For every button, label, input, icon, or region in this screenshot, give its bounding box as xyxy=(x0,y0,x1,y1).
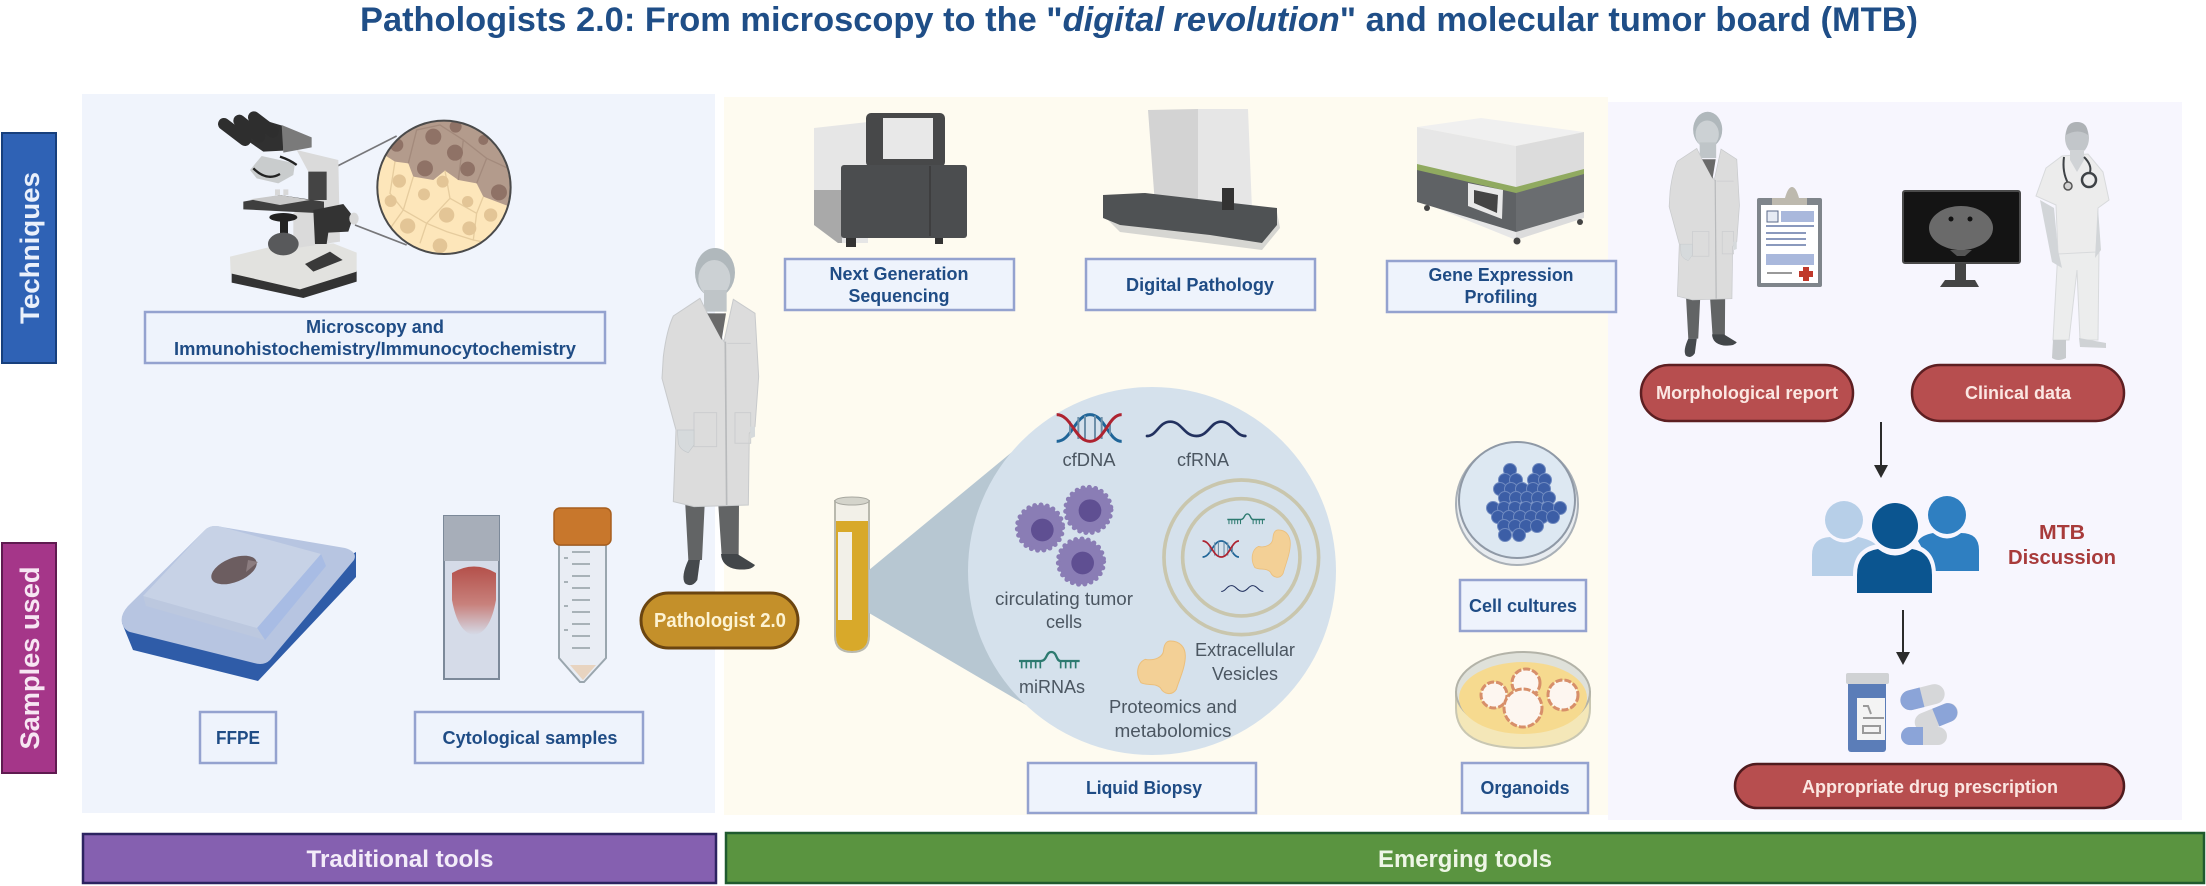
label: Microscopy and IHC/ICC: Microscopy and xyxy=(306,317,444,337)
badge: Morphological report: Morphological report xyxy=(1656,383,1838,403)
label: Liquid Biopsy xyxy=(1028,763,1256,813)
icon: gene expression analyzer xyxy=(1417,118,1584,244)
panel: traditional tools background xyxy=(82,94,715,813)
panel: clinical workflow background xyxy=(1608,102,2182,820)
label: Digital Pathology xyxy=(1086,259,1315,310)
text: miRNAs: miRNAs xyxy=(1019,677,1085,697)
label: Cytological samples xyxy=(415,712,643,763)
label: Organoids xyxy=(1462,763,1588,813)
label: Microscopy and IHC/ICC xyxy=(145,312,605,363)
icon: petri dish with cell culture xyxy=(1456,442,1578,565)
label: Microscopy and IHC/ICC: Immunohistochemistry/Immunocytochemistry xyxy=(174,339,576,359)
bar: Traditional tools: Traditional tools xyxy=(306,846,494,873)
badge: Clinical data: Clinical data xyxy=(1965,383,2072,403)
text: MTB Discussion: Discussion xyxy=(2008,547,2116,569)
label: FFPE xyxy=(200,712,276,763)
bar: Emerging tools xyxy=(726,833,2204,883)
badge: Appropriate drug prescription: Appropriate drug prescription xyxy=(1802,777,2058,797)
icon: monitor with brain scan xyxy=(1903,191,2020,287)
panel: liquid biopsy magnified circle: metabolomics xyxy=(1114,721,1232,741)
icon: miRNA xyxy=(1019,652,1080,668)
icon: circulating tumor cells xyxy=(1017,487,1111,584)
text: Extracellular Vesicles: Extracellular xyxy=(1195,640,1295,660)
text: cfDNA: cfDNA xyxy=(1062,450,1116,470)
icon: conical tube xyxy=(554,508,611,682)
label: Cytological samples: Cytological samples xyxy=(442,728,618,748)
label: Digital Pathology: Digital Pathology xyxy=(1126,275,1274,295)
badge: Pathologist 2.0 xyxy=(641,593,798,648)
label: Next Generation Sequencing xyxy=(785,259,1014,310)
icon: cfRNA strand xyxy=(1147,422,1245,436)
figure: pathologist xyxy=(662,248,759,585)
panel: liquid biopsy magnified circle xyxy=(968,387,1336,755)
icon: microscope with magnified cells xyxy=(224,117,512,298)
icon: MTB group xyxy=(1812,496,1979,597)
label: Gene Expression Profiling xyxy=(1387,261,1616,312)
text: MTB Discussion xyxy=(2008,522,2116,569)
panel: liquid biopsy magnified circle: Vesicles xyxy=(1212,664,1278,684)
callout cone: zoom into tube xyxy=(869,452,1060,705)
icon: cytology slide xyxy=(444,516,499,679)
panel: liquid biopsy magnified circle: cells xyxy=(1046,612,1082,632)
side tab: Techniques xyxy=(2,133,56,363)
side tab: Samples used xyxy=(2,543,56,773)
icon: protein xyxy=(1138,641,1185,694)
icon: clipboard report xyxy=(1757,187,1822,287)
bar: Traditional tools xyxy=(83,834,716,883)
arrow: MTB to prescription xyxy=(1896,610,1910,665)
label: Gene Expression Profiling: Gene Expression xyxy=(1428,265,1574,285)
panel: emerging tools background xyxy=(724,97,1608,815)
figure: pathologist with report xyxy=(1669,112,1739,357)
label: Cell cultures: Cell cultures xyxy=(1469,596,1577,616)
label: FFPE: FFPE xyxy=(216,728,260,748)
label: Next Generation Sequencing: Next Generation xyxy=(830,264,968,284)
icon: slide scanner xyxy=(1103,109,1280,250)
text: cfRNA: cfRNA xyxy=(1177,450,1229,470)
label: Gene Expression Profiling: Profiling xyxy=(1464,287,1538,307)
label: Organoids: Organoids xyxy=(1480,778,1570,798)
text: circulating tumor cells: circulating tumor xyxy=(995,589,1133,609)
text: MTB Discussion: MTB xyxy=(2039,522,2085,544)
badge: Pathologist 2.0: Pathologist 2.0 xyxy=(654,610,786,632)
text: Proteomics and metabolomics: Proteomics and xyxy=(1109,697,1237,717)
badge: Appropriate drug prescription xyxy=(1735,764,2124,808)
figure: clinician xyxy=(2036,122,2109,360)
badge: Morphological report xyxy=(1641,365,1853,421)
icon: organoid dish xyxy=(1456,652,1590,748)
label: Next Generation Sequencing: Sequencing xyxy=(848,286,950,306)
side tab: Techniques: Techniques xyxy=(15,172,45,324)
arrow: inputs to MTB xyxy=(1874,422,1888,478)
icon: FFPE block xyxy=(122,526,356,681)
side tab: Samples used: Samples used xyxy=(15,566,45,750)
bar: Emerging tools: Emerging tools xyxy=(1378,846,1552,873)
label: Cell cultures xyxy=(1460,580,1586,631)
icon: cfDNA helix xyxy=(1057,415,1122,441)
icon: blood collection tube xyxy=(835,497,869,652)
badge: Clinical data xyxy=(1912,365,2124,421)
icon: drug bottle and capsules xyxy=(1846,673,1961,752)
icon: sequencer xyxy=(814,113,967,247)
icon: extracellular vesicle xyxy=(1164,480,1319,635)
label: Liquid Biopsy: Liquid Biopsy xyxy=(1086,778,1202,798)
title: Pathologists 2.0: From microscopy to the "digital revolution" and molecular tumor board (MTB) xyxy=(360,1,1918,39)
